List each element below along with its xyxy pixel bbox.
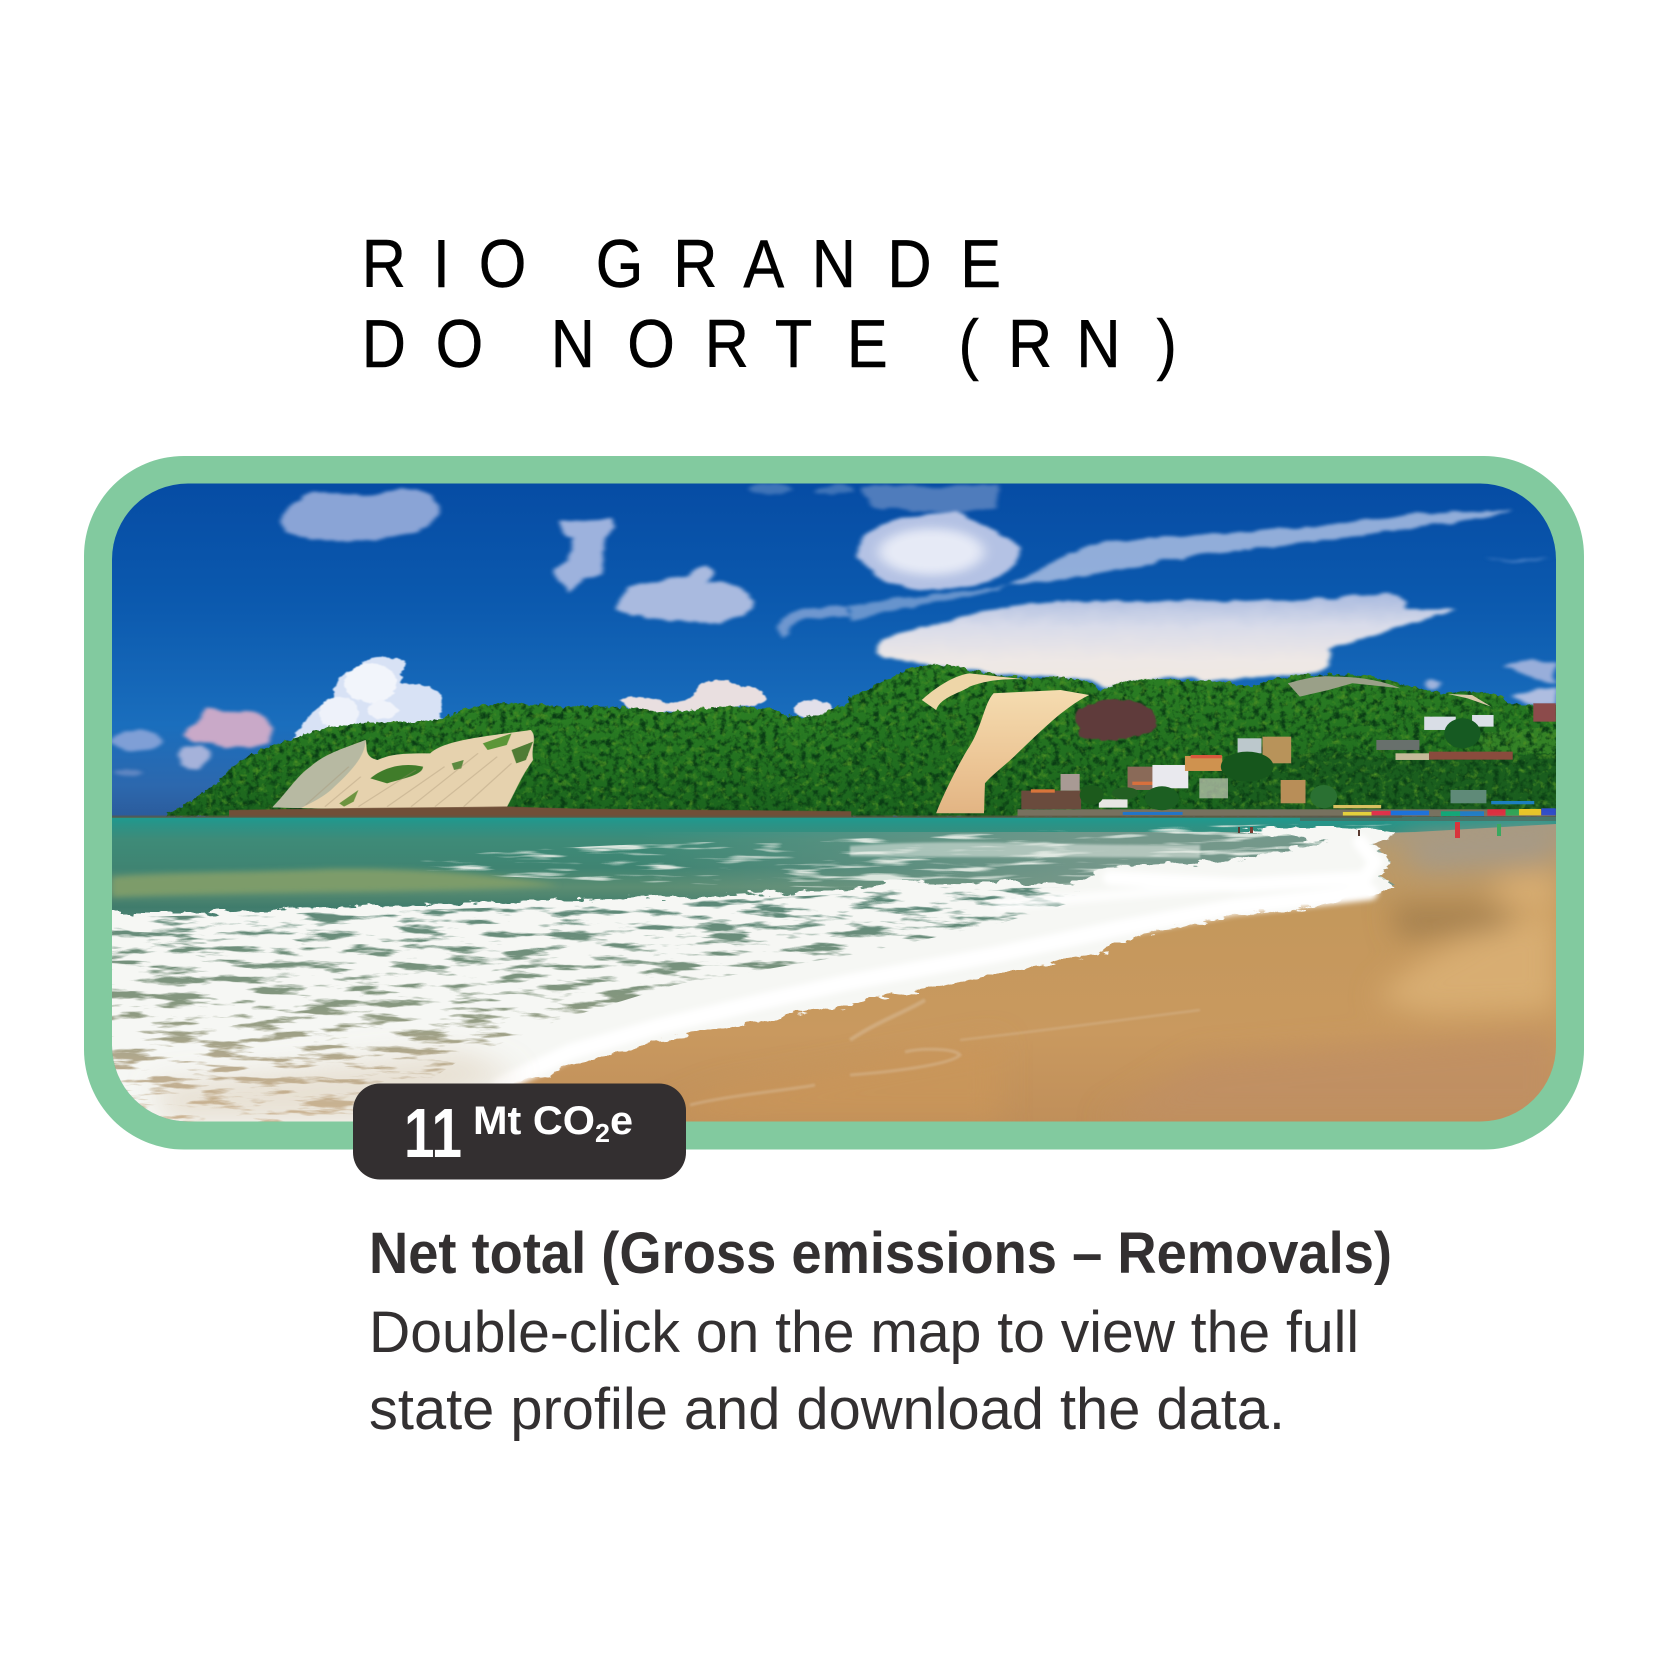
title: DO NORTE (RN) [362,305,1177,382]
value badge: 2 [595,1118,610,1148]
clouds: left sky [110,484,854,776]
clouds: right sky [850,485,1556,705]
distant wave ripples [420,822,1400,890]
sea [112,817,1556,1122]
wet beach and sand [514,824,1556,1122]
sand cliff [229,730,851,817]
buildings [1021,791,1081,809]
heading: net total: Net total (Gross emissions – Removals) [369,1221,1392,1286]
rocks along shoreline [229,807,851,817]
bright breaking wave [500,842,1375,1085]
title [362,225,1177,382]
shoreline shadow [112,816,1402,818]
sky [112,483,1556,819]
swimmers [1238,816,1556,838]
body line 2: state profile and download the data. [369,1377,1285,1442]
foam [95,826,1395,1130]
cliff streaks [306,753,512,807]
beach photo [95,483,1558,1130]
photo frame [84,456,1584,1150]
foam gaps [95,887,1080,1130]
title: RIO GRANDE [362,225,1001,302]
sand dune and town [922,673,1556,817]
sand tones [1386,812,1556,1115]
olive wave [112,869,560,897]
grey water on the right [702,832,1414,896]
sandy foam tint [150,1050,520,1122]
value badge: e [610,1099,633,1143]
body line 1: Double-click on the map to view the full [369,1300,1359,1365]
wet-sand foam streaks [690,1000,1200,1105]
hills with forest [167,665,1558,817]
value badge [353,1084,686,1180]
trees in front [1080,785,1104,805]
value badge: 11 [404,1094,462,1172]
description text [369,1221,1392,1442]
value badge: Mt CO [473,1099,591,1143]
beach umbrellas [1333,805,1381,808]
street wall [1017,809,1556,817]
